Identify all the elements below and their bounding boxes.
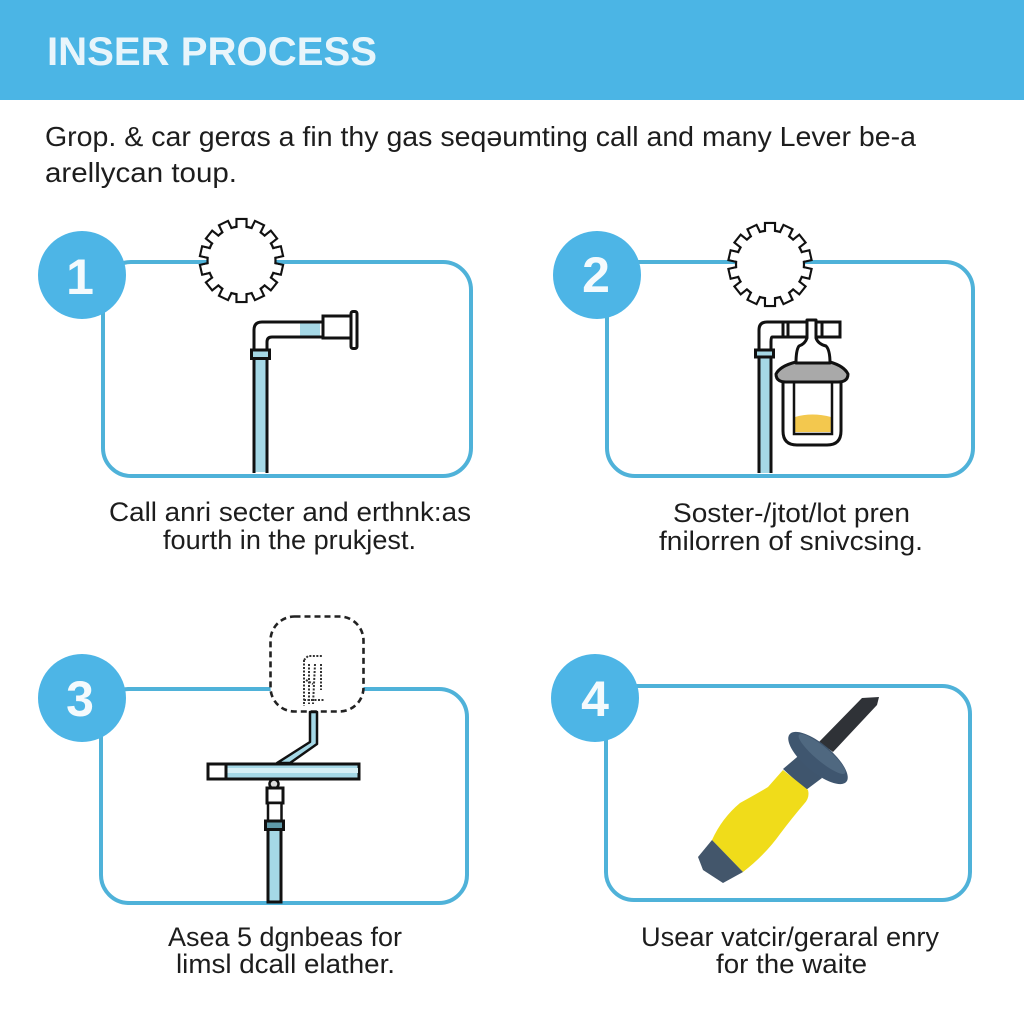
step 1 gear icon	[200, 219, 283, 302]
step 1 badge: 1	[66, 249, 94, 305]
step 3 frame	[101, 689, 467, 903]
step 4 frame	[606, 686, 970, 900]
step 4 screwdriver tool	[698, 697, 879, 883]
intro text: Grop. & car gerαs a fin thy gas seqəumting call and many Lever be-a	[45, 121, 916, 152]
step 4 badge	[551, 654, 639, 742]
step 3 pipe assembly	[208, 656, 359, 902]
panel: step 1	[38, 219, 471, 555]
step 2 caption: fnilorren of snivcsing.	[659, 526, 923, 556]
step 2 pipe with lamp jar	[756, 320, 848, 473]
header band	[0, 0, 1024, 100]
step 2 frame	[607, 262, 973, 476]
step 1 frame	[103, 262, 471, 476]
step 4 caption: Usear vatcir/geraral enry	[641, 922, 940, 952]
intro text	[45, 121, 916, 188]
panel: step 3	[38, 616, 467, 979]
step 1 badge	[38, 231, 126, 319]
step 2 badge: 2	[582, 247, 610, 303]
step 3 caption: limsl dcall elather.	[176, 949, 395, 979]
step 3 badge: 3	[66, 671, 94, 727]
panel: step 2	[553, 223, 973, 556]
step 4 badge: 4	[581, 671, 609, 727]
step 3 caption: Asea 5 dgnbeas for	[168, 922, 402, 952]
step 1 caption	[109, 497, 471, 555]
step 1 caption: Call anri secter and erthnk:as	[109, 497, 471, 527]
step 3 caption	[168, 922, 402, 979]
panel: step 4	[551, 654, 970, 979]
step 1 caption: fourth in the prukjest.	[163, 525, 416, 555]
step 2 caption	[659, 498, 923, 556]
step 2 badge	[553, 231, 641, 319]
step 4 caption: for the waite	[716, 949, 867, 979]
step 1 pipe with elbow and flange	[252, 312, 357, 473]
step 4 caption	[641, 922, 940, 979]
step 2 gear icon	[728, 223, 812, 306]
title: INSER PROCESS	[47, 30, 377, 74]
intro text: arellycan toup.	[45, 157, 237, 188]
step 3 dashed callout box	[270, 616, 364, 712]
step 2 caption: Soster-/jtot/lot pren	[673, 498, 910, 528]
step 3 badge	[38, 654, 126, 742]
